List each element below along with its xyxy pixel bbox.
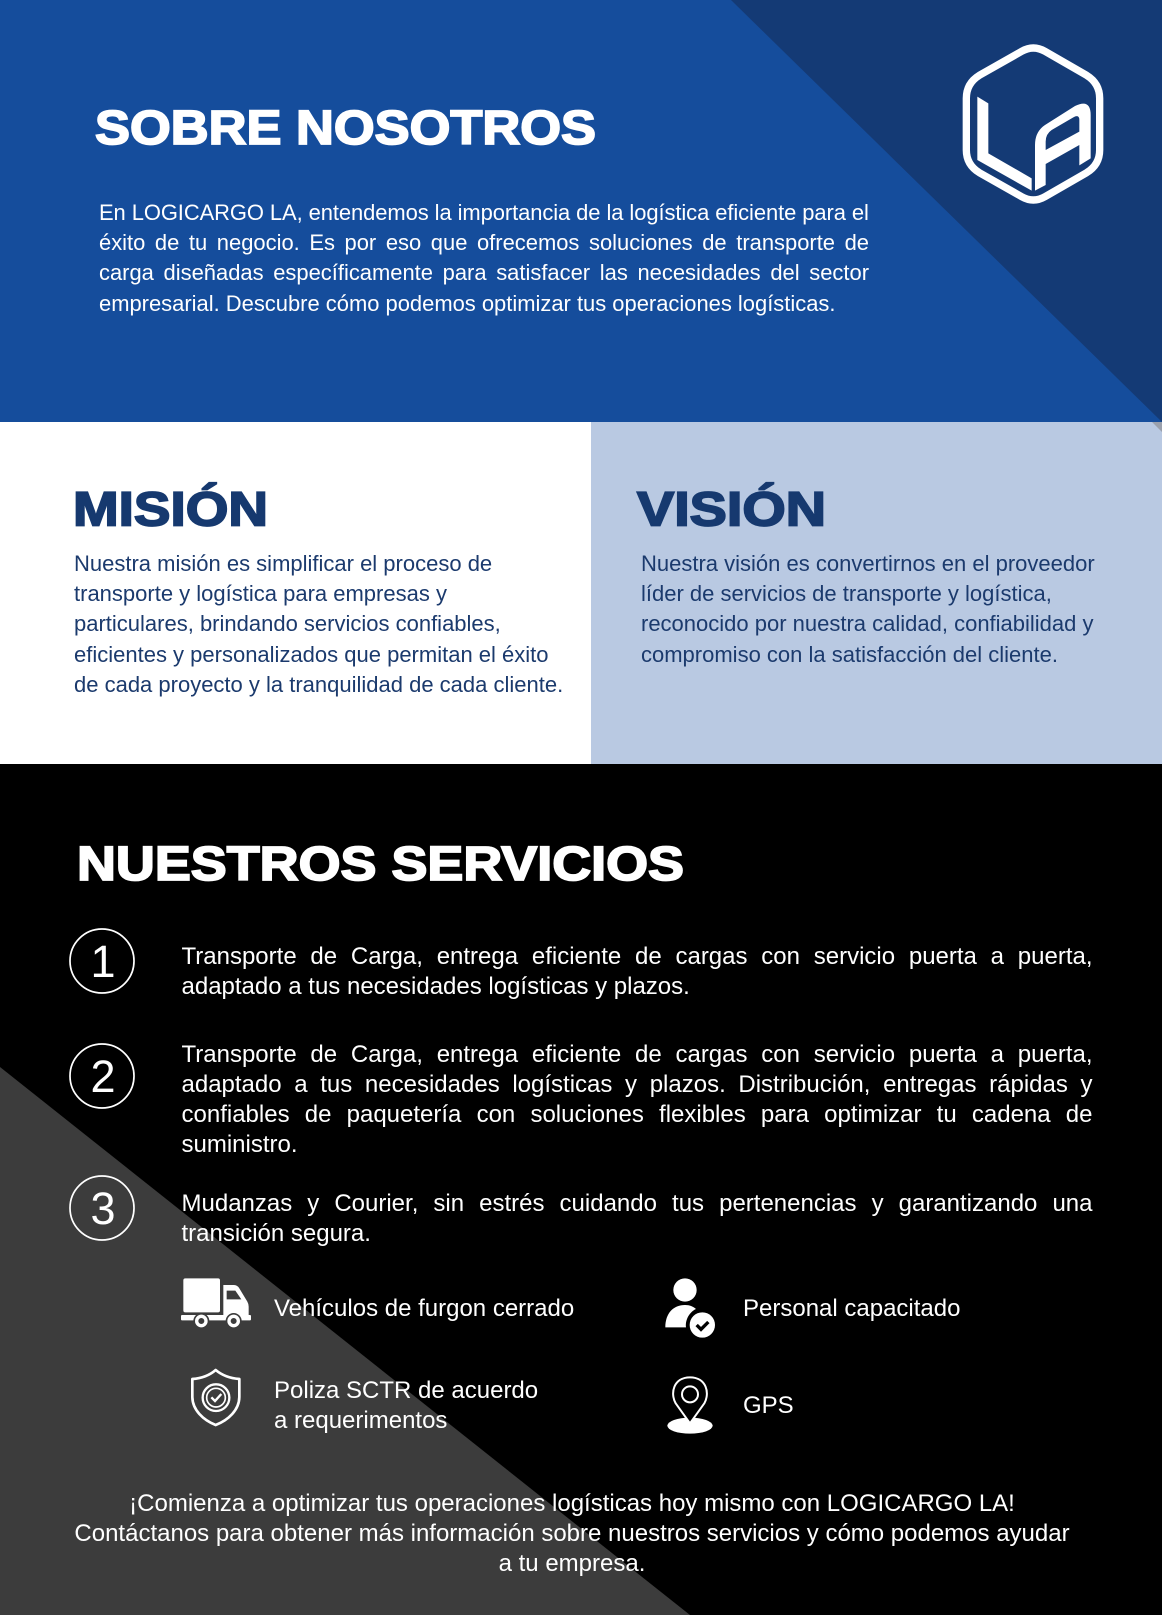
number badge 1: 1 [90,936,116,987]
text block: mision: particulares, brindando servicios confiables, [74,611,501,636]
text block: mision: transporte y logística para empresas y [74,581,447,606]
feature: furgon: Vehículos de furgon cerrado [274,1295,574,1322]
panel: nuestros servicios [0,764,1162,1615]
text block: intro [99,200,869,316]
number badge 1 [69,928,135,994]
feature: poliza: Poliza SCTR de acuerdo [274,1377,538,1404]
text block: closing call to action [74,1490,1070,1577]
heading: sobre nosotros: SOBRE NOSOTROS [95,102,596,155]
icon: shield check [191,1368,241,1426]
text block: intro: empresarial. Descubre cómo podemos optimizar tus operaciones logísticas. [99,291,835,316]
text block: mision: de cada proyecto y la tranquilidad de cada cliente. [74,672,563,697]
service 2 text: Transporte de Carga, entrega eficiente de cargas con servicio puerta a puerta, [182,1040,1092,1068]
feature: poliza [274,1377,538,1434]
text block: vision: compromiso con la satisfacción del cliente. [641,642,1058,667]
service 2 text: suministro. [182,1131,298,1158]
text block: vision: reconocido por nuestra calidad, confiabilidad y [641,611,1094,636]
panel: mision [0,422,591,764]
service 2 text [182,1040,1092,1158]
feature: personal: Personal capacitado [743,1295,960,1322]
text block: vision [641,551,1095,667]
text block: closing call to action: a tu empresa. [499,1550,645,1577]
service 2 text: adaptado a tus necesidades logísticas y plazos. Distribución, entregas rápidas y [182,1071,1092,1098]
icon: LA hexagon logo [962,44,1104,204]
text block: intro: En LOGICARGO LA, entendemos la importancia de la logística eficiente para el [99,200,869,225]
feature: poliza: a requerimentos [274,1407,447,1434]
heading: vision: VISIÓN [637,482,826,536]
heading: nuestros servicios: NUESTROS SERVICIOS [77,838,684,891]
number badge 2: 2 [90,1051,116,1102]
icon: corner sliver [1152,422,1162,432]
text block: intro: carga diseñadas específicamente para satisfacer las necesidades del sector [99,260,869,285]
text block: vision: líder de servicios de transporte y logística, [641,581,1052,606]
heading: mision: MISIÓN [73,482,268,536]
panel: vision [591,422,1162,764]
service 3 text [182,1190,1092,1247]
icon: person check [665,1278,715,1338]
service 1 text [182,942,1092,1000]
panel: sobre nosotros [0,0,1162,422]
service 1 text: adaptado a tus necesidades logísticas y plazos. [182,973,690,1000]
number badge 3: 3 [90,1183,116,1234]
text block: mision [74,551,563,697]
number badge 3 [69,1175,135,1241]
text block: vision: Nuestra visión es convertirnos en el proveedor [641,551,1095,576]
service 1 text: Transporte de Carga, entrega eficiente de cargas con servicio puerta a puerta, [182,942,1092,970]
icon: gps pin [667,1376,713,1434]
service 3 text: transición segura. [182,1220,371,1247]
number badge 2 [69,1043,135,1109]
text block: mision: eficientes y personalizados que permitan el éxito [74,642,548,667]
icon: truck [181,1278,251,1328]
text block: intro: éxito de tu negocio. Es por eso que ofrecemos soluciones de transporte de [99,230,869,255]
service 2 text: confiables de paquetería con soluciones flexibles para optimizar tu cadena de [182,1101,1092,1128]
text block: closing call to action: Contáctanos para obtener más información sobre nuestros servicios y cómo podemos ayudar [74,1520,1070,1547]
text block: mision: Nuestra misión es simplificar el proceso de [74,551,492,576]
service 3 text: Mudanzas y Courier, sin estrés cuidando tus pertenencias y garantizando una [182,1190,1092,1216]
feature: gps: GPS [743,1392,794,1419]
text block: closing call to action: ¡Comienza a optimizar tus operaciones logísticas hoy mismo con LOGICARGO LA! [129,1490,1015,1517]
